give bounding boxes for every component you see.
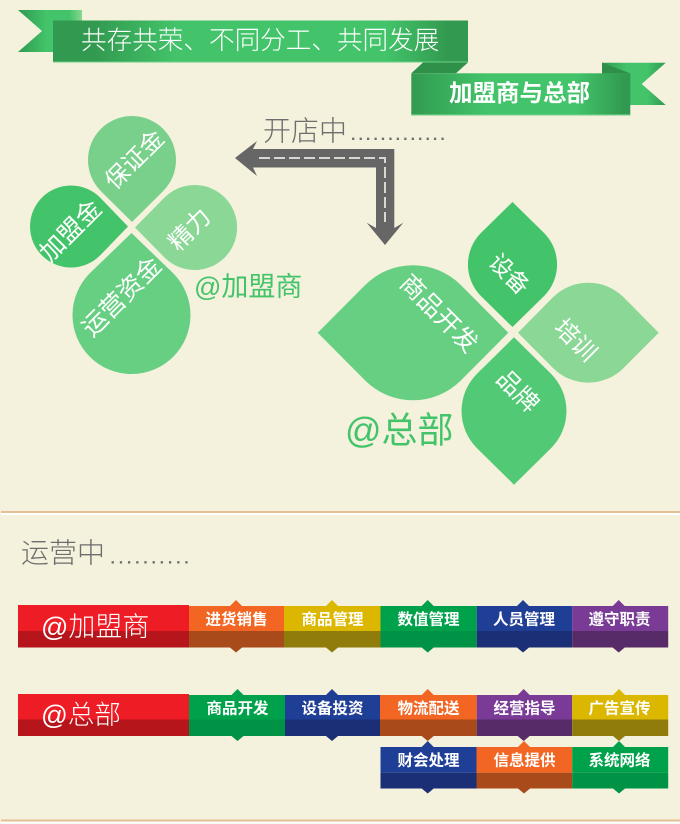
heading: in operation: .......... bbox=[110, 550, 192, 568]
clover: headquarters contributions bbox=[318, 202, 659, 485]
petal: franchise fee: 加盟金 bbox=[35, 195, 107, 267]
cell: accounting bbox=[380, 741, 476, 794]
label bar: franchisee: @加盟商 bbox=[41, 612, 149, 642]
cell: numeric management bbox=[380, 600, 477, 652]
cell: information provision: 信息提供 bbox=[493, 750, 556, 770]
subtitle text: 加盟商与总部 bbox=[449, 80, 590, 106]
cell: duty compliance bbox=[572, 600, 668, 652]
cell: logistics: 物流配送 bbox=[397, 698, 460, 718]
cell: product management: 商品管理 bbox=[301, 610, 364, 628]
petal: deposit: 保证金 bbox=[100, 125, 170, 195]
cell: duty compliance: 遵守职责 bbox=[588, 610, 651, 628]
cell: system network: 系统网络 bbox=[588, 750, 651, 770]
petal: equipment bbox=[468, 202, 557, 327]
cell: business guidance bbox=[477, 689, 572, 741]
row: franchisee duties bbox=[18, 600, 668, 652]
petal: deposit bbox=[88, 116, 176, 222]
row: headquarters duties bbox=[18, 689, 668, 794]
heading: in operation: 运营中 bbox=[21, 538, 105, 568]
petal: operating capital: 运营资金 bbox=[77, 252, 167, 342]
label: headquarters: @总部 bbox=[345, 410, 454, 450]
cell: numeric management: 数值管理 bbox=[397, 610, 460, 628]
label bar: headquarters: @总部 bbox=[41, 700, 121, 730]
petal: operating capital bbox=[73, 233, 190, 374]
cell: advertising: 广告宣传 bbox=[588, 698, 651, 718]
cell: purchasing and sales: 进货销售 bbox=[205, 610, 268, 628]
cell: logistics bbox=[380, 689, 477, 741]
title text: 共存共荣、不同分工、共同发展 bbox=[81, 26, 439, 55]
petal: product development: 商品开发 bbox=[394, 269, 483, 358]
clover: franchisee contributions bbox=[30, 116, 237, 374]
petal: franchise fee bbox=[30, 185, 128, 268]
label bar: headquarters bbox=[18, 694, 189, 736]
petal: effort: 精力 bbox=[163, 203, 217, 257]
cell: purchasing and sales bbox=[189, 600, 284, 652]
cell: personnel management: 人员管理 bbox=[493, 610, 555, 628]
petal: brand: 品牌 bbox=[491, 365, 544, 418]
cell: business guidance: 经营指导 bbox=[493, 700, 556, 718]
cell: equipment investment bbox=[285, 689, 380, 741]
heading: in operation bbox=[21, 538, 192, 568]
cell: personnel management bbox=[477, 600, 572, 652]
heading: store opening: 开店中 bbox=[263, 116, 347, 146]
petal: training: 培训 bbox=[548, 314, 602, 367]
cell: product development bbox=[189, 689, 285, 741]
petal: training bbox=[518, 283, 659, 383]
banner: franchisee and headquarters ribbon bbox=[411, 62, 666, 115]
cell: product development: 商品开发 bbox=[206, 698, 269, 718]
heading: store opening bbox=[263, 116, 448, 146]
label: franchisee: @加盟商 bbox=[194, 272, 302, 302]
heading: store opening: ............. bbox=[351, 127, 448, 144]
banner: main title ribbon bbox=[18, 10, 468, 62]
arrow: flow from headquarters to franchisee bbox=[235, 141, 403, 245]
petal: product development bbox=[318, 265, 508, 400]
petal: effort bbox=[135, 185, 237, 270]
cell: advertising bbox=[572, 689, 668, 741]
petal: equipment: 设备 bbox=[484, 249, 535, 299]
cell: accounting: 财会处理 bbox=[397, 750, 460, 770]
petal: brand bbox=[462, 337, 566, 485]
cell: equipment investment: 设备投资 bbox=[301, 698, 364, 718]
label bar: franchisee bbox=[18, 605, 189, 648]
cell: product management bbox=[284, 600, 380, 652]
cell: system network bbox=[572, 741, 668, 794]
cell: information provision bbox=[476, 741, 572, 794]
